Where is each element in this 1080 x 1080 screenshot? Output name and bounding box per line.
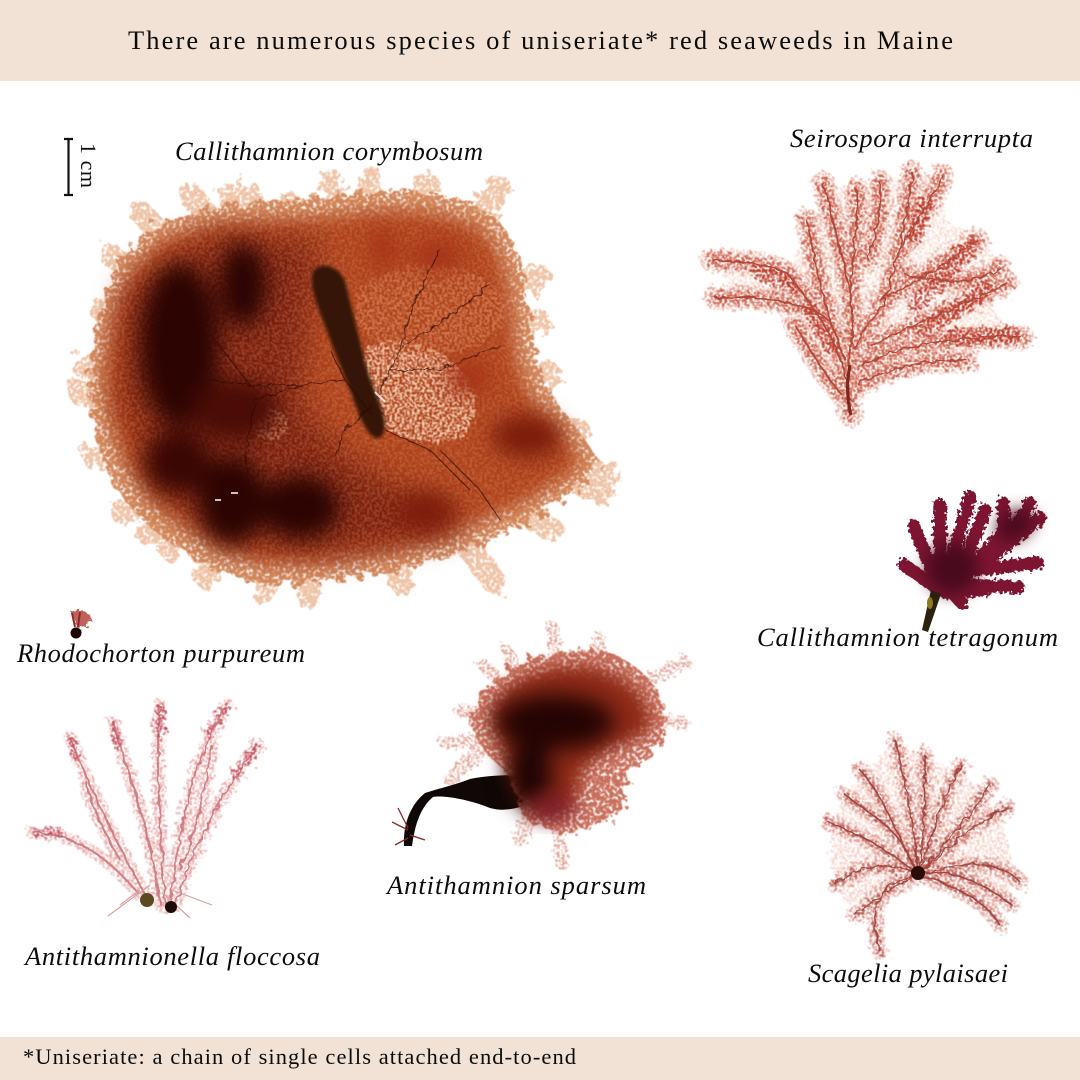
darkest core <box>495 694 615 809</box>
red feathers <box>712 172 1022 415</box>
medium red patches <box>369 227 563 531</box>
dark stipe <box>404 775 525 846</box>
seaweed: Rhodochorton purpureum <box>70 610 92 638</box>
pale centre <box>252 265 505 464</box>
label: Callithamnion tetragonum: Callithamnion tetragonum <box>757 622 1058 652</box>
label: Antithamnion sparsum: Antithamnion sparsum <box>385 870 646 900</box>
header banner <box>0 0 1080 81</box>
pale flecks <box>215 392 385 500</box>
dark stipe <box>312 266 385 438</box>
footer banner <box>0 1037 1080 1080</box>
pale feathers <box>32 705 258 905</box>
pale feathers <box>712 172 1022 415</box>
holdfast filaments <box>392 808 425 845</box>
darkest patches <box>140 243 340 544</box>
label: Antithamnionella floccosa: Antithamnionella floccosa <box>23 941 320 971</box>
dark red patches <box>760 205 1012 345</box>
red feathers <box>828 740 1020 952</box>
basal spray <box>108 885 212 918</box>
label: Rhodochorton purpureum: Rhodochorton purpureum <box>16 638 305 668</box>
pale silhouette <box>720 175 1015 410</box>
branches <box>904 497 1040 603</box>
outer body <box>472 649 666 832</box>
scale bar: 1 cm: 1 cm <box>76 143 101 188</box>
seaweed: Antithamnion sparsum <box>392 628 685 865</box>
fine dark branches <box>210 250 500 520</box>
label: Scagelia pylaisaei: Scagelia pylaisaei <box>808 958 1008 988</box>
holdfasts <box>165 901 177 913</box>
dark core <box>926 503 1039 594</box>
seaweed: Antithamnionella floccosa <box>32 705 258 918</box>
pale silhouette <box>830 745 1015 915</box>
stems <box>32 705 258 905</box>
main stems <box>712 172 1022 415</box>
speckled texture <box>106 210 582 562</box>
seaweed: Seirospora interrupta <box>712 172 1022 415</box>
pale feathers <box>828 740 1020 952</box>
deeper red-brown shading <box>120 232 470 555</box>
outer tips <box>445 628 685 865</box>
footnote: *Uniseriate: a chain of single cells attached end-to-end <box>23 1044 576 1069</box>
dark pink tips <box>36 708 256 832</box>
outer body <box>89 191 600 585</box>
stems <box>828 740 1020 952</box>
label: Callithamnion corymbosum: Callithamnion corymbosum <box>175 136 483 166</box>
mid red <box>491 665 651 814</box>
lower crimson lobe <box>528 792 576 824</box>
holdfast <box>922 590 941 632</box>
label: Seirospora interrupta: Seirospora interrupta <box>790 123 1033 153</box>
outer fringe tips <box>80 179 610 598</box>
mid body <box>106 210 582 562</box>
scale bar: 1 cm <box>64 139 101 195</box>
seaweed: Callithamnion corymbosum <box>80 179 610 598</box>
seaweed: Scagelia pylaisaei <box>828 740 1020 952</box>
seaweed: Callithamnion tetragonum <box>904 497 1040 632</box>
title: There are numerous species of uniseriate* red seaweeds in Maine <box>128 25 953 55</box>
